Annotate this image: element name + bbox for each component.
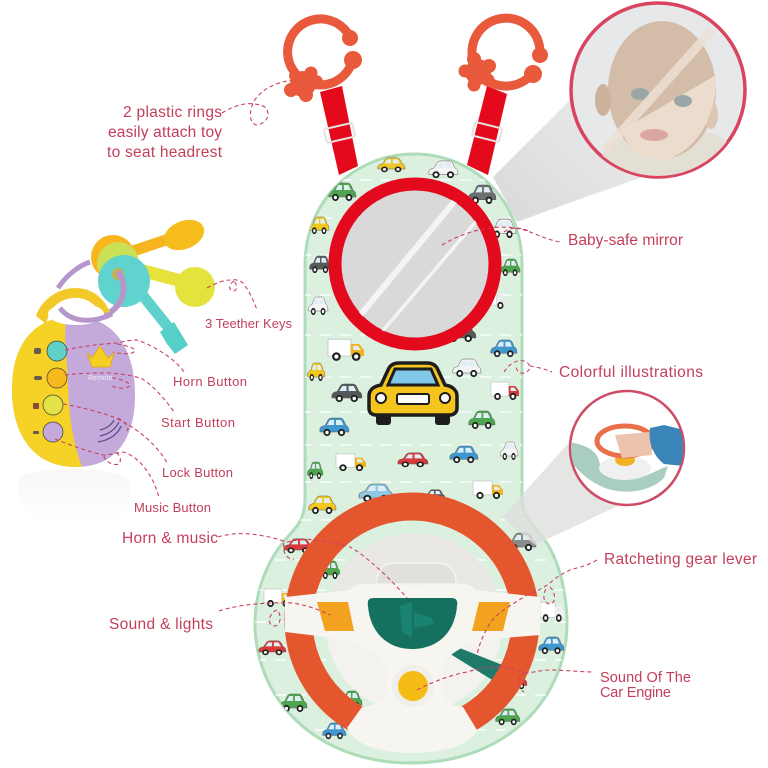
label: colorful illustrations: Colorful illustrations [559, 364, 703, 381]
horn button [47, 341, 67, 361]
icon: crown [87, 346, 114, 367]
music button [43, 422, 63, 442]
start button [47, 368, 67, 388]
lime key [97, 242, 215, 307]
annotation lines [55, 80, 597, 692]
icon: sound waves [98, 420, 121, 442]
reflection under key fob [18, 469, 131, 520]
mirror [335, 184, 495, 344]
label: horn and music: Horn & music [122, 530, 218, 547]
label: ratcheting gear lever: Ratcheting gear lever [604, 551, 757, 568]
label: plastic rings: easily attach toy [108, 124, 222, 141]
label: start button: Start Button [161, 415, 235, 430]
panel: green play mat [255, 154, 570, 763]
label: baby-safe mirror: Baby-safe mirror [568, 232, 683, 249]
orange key [91, 214, 209, 279]
gear lever [447, 645, 510, 686]
lock button [43, 395, 63, 415]
beam: steering wheel highlight [502, 436, 620, 545]
label: horn button: Horn Button [173, 374, 247, 389]
key fob [12, 262, 135, 467]
steering wheel [285, 506, 540, 753]
icon: left plastic ring [284, 19, 362, 102]
label: sound and lights: Sound & lights [109, 616, 213, 633]
key fob: Remote [88, 375, 113, 382]
label: plastic rings [107, 104, 223, 161]
fob side icons [33, 348, 42, 434]
teether keys [91, 214, 215, 354]
strap: right [467, 86, 507, 175]
label: music button: Music Button [134, 500, 211, 515]
callout: baby reflection circle [571, 3, 750, 180]
teal key [98, 255, 188, 354]
label: sound of the car engine: Sound Of The [600, 670, 691, 686]
label: lock button: Lock Button [162, 465, 233, 480]
callout: hands on wheel circle [570, 391, 684, 505]
illustration: small vehicles pattern [259, 158, 564, 739]
label: sound of the car engine [600, 670, 691, 701]
label: plastic rings: to seat headrest [107, 144, 223, 161]
beam: mirror highlight [493, 70, 640, 222]
label: sound of the car engine: Car Engine [600, 685, 671, 701]
label: 3 teether keys: 3 Teether Keys [205, 316, 292, 331]
strap: left [320, 86, 358, 175]
icon: right plastic ring [458, 18, 548, 91]
label: plastic rings: 2 plastic rings [123, 104, 222, 121]
icon: yellow car [369, 363, 457, 425]
